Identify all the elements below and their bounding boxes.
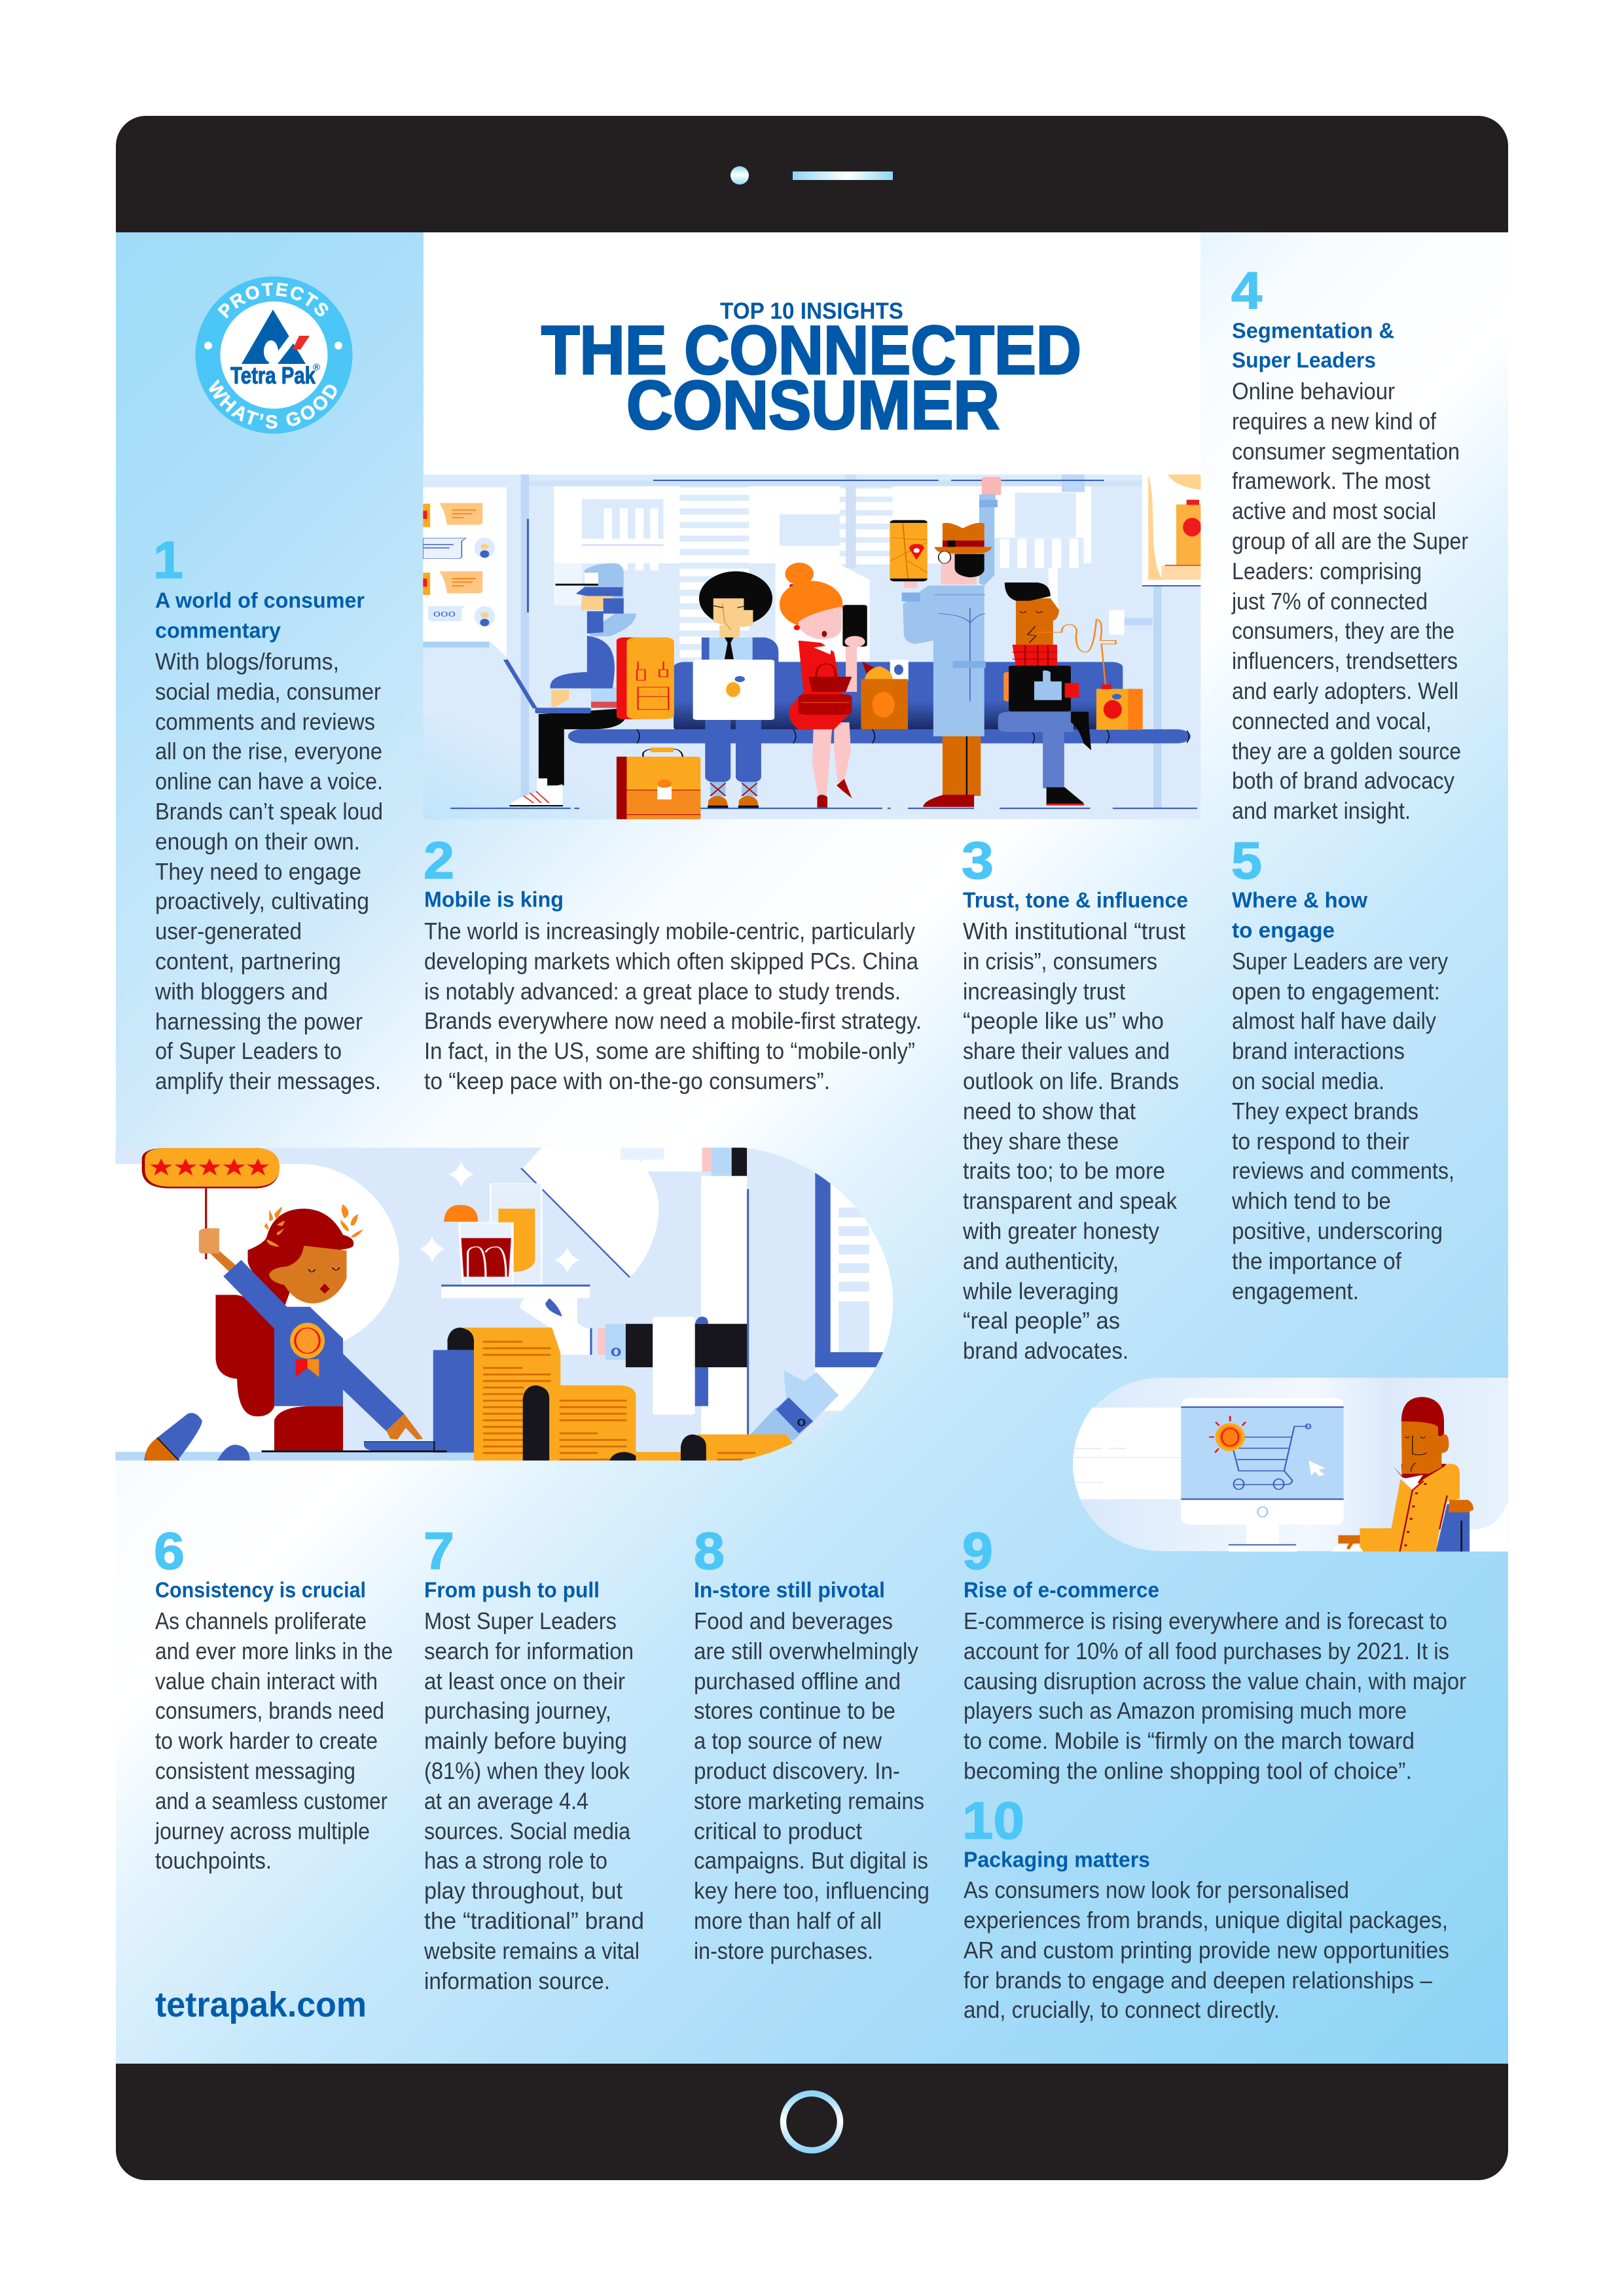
body 8: in-store purchases. xyxy=(694,1937,873,1964)
insight 1 xyxy=(153,531,383,1094)
body 2 xyxy=(424,918,922,1094)
body 9: E-commerce is rising everywhere and is forecast to xyxy=(964,1607,1447,1634)
heading 4: Super Leaders xyxy=(1232,348,1376,372)
body 5: brand interactions xyxy=(1232,1037,1405,1064)
body 7: the “traditional” brand xyxy=(424,1907,644,1934)
body 4 xyxy=(1231,378,1468,824)
body 10: As consumers now look for personalised xyxy=(964,1876,1349,1903)
body 3: With institutional “trust xyxy=(963,918,1185,944)
number 9: 9 xyxy=(962,1522,993,1580)
icon: sparkles xyxy=(420,1162,580,1272)
number 3: 3 xyxy=(962,831,994,889)
number 8: 8 xyxy=(694,1522,725,1580)
body 6: journey across multiple xyxy=(154,1818,370,1844)
heading 3: Trust, tone & influence xyxy=(963,888,1188,912)
body 5: Super Leaders are very xyxy=(1232,948,1448,975)
body 10: for brands to engage and deepen relationships – xyxy=(964,1967,1432,1994)
home button xyxy=(783,2093,840,2151)
heading 4: Segmentation & xyxy=(1232,318,1394,343)
body 8: campaigns. But digital is xyxy=(694,1847,928,1874)
body 7: website remains a vital xyxy=(424,1937,640,1964)
pencils xyxy=(145,1413,250,1461)
body 7: at an average 4.4 xyxy=(424,1787,588,1814)
body 8 xyxy=(694,1607,929,1964)
body 9: causing disruption across the value chain, with major xyxy=(964,1668,1466,1695)
body 3: need to show that xyxy=(963,1098,1136,1124)
body 8: stores continue to be xyxy=(694,1697,895,1724)
body 2: In fact, in the US, some are shifting to “mobile-only” xyxy=(424,1037,915,1064)
body 6 xyxy=(154,1607,393,1874)
number 5: 5 xyxy=(1231,831,1262,889)
icon: shopping cart xyxy=(1209,1416,1310,1490)
heading 7: From push to pull xyxy=(424,1577,600,1602)
body 1: proactively, cultivating xyxy=(155,888,369,914)
body 4: group of all are the Super xyxy=(1232,528,1468,554)
body 3: “real people” as xyxy=(963,1307,1120,1334)
heading 1 xyxy=(155,588,365,643)
body 2: The world is increasingly mobile-centric, particularly xyxy=(424,918,915,944)
body 6: and ever more links in the xyxy=(155,1638,393,1664)
illustration: commuters on a bench xyxy=(423,475,1201,819)
website link text: tetrapak.com xyxy=(155,1985,367,2024)
body 10: AR and custom printing provide new opportunities xyxy=(964,1937,1449,1964)
woman with star rating xyxy=(142,1148,447,1452)
body 4: and market insight. xyxy=(1232,797,1411,824)
briefcase xyxy=(617,747,700,819)
body 7: sources. Social media xyxy=(424,1818,631,1844)
window and arm backdrop xyxy=(521,1147,897,1435)
body 1: with bloggers and xyxy=(154,978,328,1005)
body 5: engagement. xyxy=(1232,1278,1359,1304)
number 4: 4 xyxy=(1231,261,1263,319)
body 8: product discovery. In- xyxy=(694,1757,900,1784)
body 3: traits too; to be more xyxy=(963,1157,1165,1184)
person at computer xyxy=(1331,1397,1473,1552)
body 9: becoming the online shopping tool of choice”. xyxy=(964,1757,1412,1784)
body 9: to come. Mobile is “firmly on the march toward xyxy=(964,1727,1415,1754)
logo: Tetra Pak: WHAT’S GOOD xyxy=(208,379,337,429)
body 5: almost half have daily xyxy=(1232,1007,1436,1034)
body 4: just 7% of connected xyxy=(1231,588,1428,615)
body 10 xyxy=(964,1876,1449,2023)
insight 8 xyxy=(694,1522,929,1964)
body 2: developing markets which often skipped PCs. China xyxy=(424,948,919,975)
insight 3 xyxy=(962,831,1188,1364)
body 1: harnessing the power xyxy=(155,1008,363,1035)
body 4: active and most social xyxy=(1232,497,1436,524)
body 1 xyxy=(154,648,383,1094)
body 3: increasingly trust xyxy=(963,978,1125,1005)
body 8: critical to product xyxy=(694,1818,862,1844)
body 1: comments and reviews xyxy=(155,708,375,735)
body 7: information source. xyxy=(424,1967,610,1994)
body 5: open to engagement: xyxy=(1232,978,1440,1005)
number 10: 10 xyxy=(962,1791,1024,1850)
body 7: play throughout, but xyxy=(424,1877,623,1904)
drink on tray xyxy=(441,1183,590,1298)
body 1: enough on their own. xyxy=(155,828,360,855)
floor line xyxy=(450,808,1197,809)
body 4: they are a golden source xyxy=(1232,738,1461,764)
body 10: and, crucially, to connect directly. xyxy=(964,1996,1280,2023)
body 1: user-generated xyxy=(155,918,302,944)
body 4: both of brand advocacy xyxy=(1232,767,1454,794)
body 9 xyxy=(964,1607,1466,1784)
body 6: to work harder to create xyxy=(155,1727,378,1754)
body 5: on social media. xyxy=(1232,1067,1384,1094)
person: man with headphones xyxy=(998,583,1115,806)
logo: Tetra Pak: Tetra Pak xyxy=(230,362,316,389)
heading 2: Mobile is king xyxy=(424,888,564,911)
body 7: purchasing journey, xyxy=(424,1697,611,1724)
title: THE CONNECTED xyxy=(541,312,1081,389)
body 7 xyxy=(424,1607,644,1994)
body 4: requires a new kind of xyxy=(1232,408,1437,435)
body 8: are still overwhelmingly xyxy=(694,1638,918,1664)
heading 6: Consistency is crucial xyxy=(155,1577,366,1602)
body 4: Leaders: comprising xyxy=(1232,558,1422,584)
person: standing man with tablet xyxy=(890,477,1001,807)
bench xyxy=(568,662,1191,744)
heading 10: Packaging matters xyxy=(964,1847,1150,1872)
person: woman with phone xyxy=(780,563,867,808)
body 10: experiences from brands, unique digital packages, xyxy=(964,1907,1448,1933)
logo: Tetra Pak: ® xyxy=(313,362,320,373)
body 3: share their values and xyxy=(963,1037,1170,1064)
window and skyline xyxy=(554,475,1091,662)
body 3: brand advocates. xyxy=(963,1337,1128,1364)
body 6: touchpoints. xyxy=(155,1847,272,1874)
body 7: Most Super Leaders xyxy=(424,1607,617,1634)
body 7: search for information xyxy=(424,1638,634,1664)
insight 5 xyxy=(1231,831,1454,1304)
number 1: 1 xyxy=(153,531,183,589)
waiter arm and hand xyxy=(520,1298,747,1415)
body 1: of Super Leaders to xyxy=(155,1037,342,1064)
insight 10 xyxy=(962,1791,1449,2023)
body 7: has a strong role to xyxy=(424,1847,607,1874)
body 1: social media, consumer xyxy=(155,678,381,705)
body 4: influencers, trendsetters xyxy=(1232,647,1458,674)
backpack xyxy=(617,637,674,719)
heading 5: to engage xyxy=(1232,918,1335,942)
body 9: account for 10% of all food purchases by 2021. It is xyxy=(964,1638,1449,1664)
body 9: players such as Amazon promising much more xyxy=(964,1697,1407,1724)
body 1: content, partnering xyxy=(155,948,341,975)
body 3: “people like us” who xyxy=(963,1007,1164,1034)
insight 2 xyxy=(424,831,922,1094)
logo: Tetra Pak xyxy=(195,276,352,433)
body 6: consumers, brands need xyxy=(155,1697,384,1724)
body 3 xyxy=(962,918,1185,1364)
body 2: Brands everywhere now need a mobile-first strategy. xyxy=(424,1007,922,1034)
body 6: value chain interact with xyxy=(155,1668,378,1695)
title: TOP 10 INSIGHTS xyxy=(720,298,903,324)
body 4: and early adopters. Well xyxy=(1232,677,1458,704)
body 8: a top source of new xyxy=(694,1727,882,1754)
icon: cursor xyxy=(1308,1461,1326,1477)
number 2: 2 xyxy=(424,831,454,889)
body 8: store marketing remains xyxy=(694,1787,924,1814)
body 1: all on the rise, everyone xyxy=(155,738,382,764)
body 4: connected and vocal, xyxy=(1232,708,1432,734)
body 8: key here too, influencing xyxy=(694,1877,929,1904)
body 1: They need to engage xyxy=(155,858,361,885)
body 4: Online behaviour xyxy=(1232,378,1395,404)
number 7: 7 xyxy=(424,1522,454,1580)
number 6: 6 xyxy=(154,1522,185,1580)
title xyxy=(541,298,1081,444)
body 1: online can have a voice. xyxy=(155,768,383,795)
body 4: consumers, they are the xyxy=(1232,617,1454,644)
body 3: in crisis”, consumers xyxy=(963,948,1157,975)
illustration: online shopping xyxy=(1073,1378,1508,1553)
insight 9 xyxy=(962,1522,1466,1784)
juice carton xyxy=(1096,685,1143,730)
insight 7 xyxy=(424,1522,644,1994)
body 7: (81%) when they look xyxy=(424,1757,630,1784)
body 4: framework. The most xyxy=(1232,467,1430,494)
social feed panel: 000 xyxy=(433,610,456,619)
shopping bag xyxy=(861,660,909,729)
body 7: mainly before buying xyxy=(424,1727,627,1754)
body 5 xyxy=(1231,948,1454,1304)
tablet frame xyxy=(116,116,1508,2180)
heading 1: commentary xyxy=(155,618,281,643)
floor xyxy=(115,1452,477,1461)
poster with carton xyxy=(1142,475,1201,586)
heading 1: A world of consumer xyxy=(155,588,365,613)
insight 4 xyxy=(1231,261,1468,824)
body 3: transparent and speak xyxy=(963,1187,1178,1214)
body 3: while leveraging xyxy=(962,1278,1119,1304)
monitor xyxy=(1181,1398,1344,1553)
body 7: at least once on their xyxy=(424,1668,625,1695)
body 5: They expect brands xyxy=(1232,1098,1418,1124)
insight 6 xyxy=(154,1522,393,1874)
body 4: consumer segmentation xyxy=(1232,438,1460,465)
title: CONSUMER xyxy=(626,367,1000,444)
rail and poles xyxy=(521,475,1161,809)
heading 9: Rise of e-commerce xyxy=(964,1577,1159,1602)
body 6: As channels proliferate xyxy=(155,1607,367,1634)
logo: Tetra Pak: PROTECTS xyxy=(217,283,329,318)
social feed panel xyxy=(423,488,507,657)
body 3: outlook on life. Brands xyxy=(963,1067,1179,1094)
body 3: they share these xyxy=(963,1128,1119,1155)
body 1: amplify their messages. xyxy=(155,1067,381,1094)
speaker bar xyxy=(793,171,893,180)
body 1: With blogs/forums, xyxy=(155,648,339,675)
heading 8: In-store still pivotal xyxy=(694,1577,885,1602)
title panel xyxy=(424,232,1200,478)
body 3: with greater honesty xyxy=(962,1217,1159,1244)
screen background xyxy=(116,232,1508,2064)
body 5: which tend to be xyxy=(1231,1187,1391,1214)
body 6: and a seamless customer xyxy=(155,1787,388,1814)
body 3: and authenticity, xyxy=(963,1247,1119,1274)
heading 5 xyxy=(1232,888,1367,942)
illustration: reviews and rating xyxy=(115,1147,897,1462)
camera dot xyxy=(731,166,749,185)
body 5: to respond to their xyxy=(1232,1128,1409,1155)
person: seated man with white laptop xyxy=(693,571,778,808)
body 5: reviews and comments, xyxy=(1232,1157,1454,1184)
person: man with cap and laptop xyxy=(505,564,636,806)
body 8: more than half of all xyxy=(694,1907,882,1934)
heading 4 xyxy=(1232,318,1394,372)
body 1: Brands can’t speak loud xyxy=(155,798,383,825)
review scrolls xyxy=(433,1327,839,1461)
heading 5: Where & how xyxy=(1232,888,1367,912)
body 5: the importance of xyxy=(1232,1247,1402,1274)
body 8: Food and beverages xyxy=(694,1607,893,1634)
body 2: is notably advanced: a great place to study trends. xyxy=(424,978,901,1005)
body 8: purchased offline and xyxy=(694,1668,901,1695)
body 6: consistent messaging xyxy=(155,1757,355,1784)
body 2: to “keep pace with on-the-go consumers”. xyxy=(424,1067,830,1094)
body 5: positive, underscoring xyxy=(1232,1217,1443,1244)
